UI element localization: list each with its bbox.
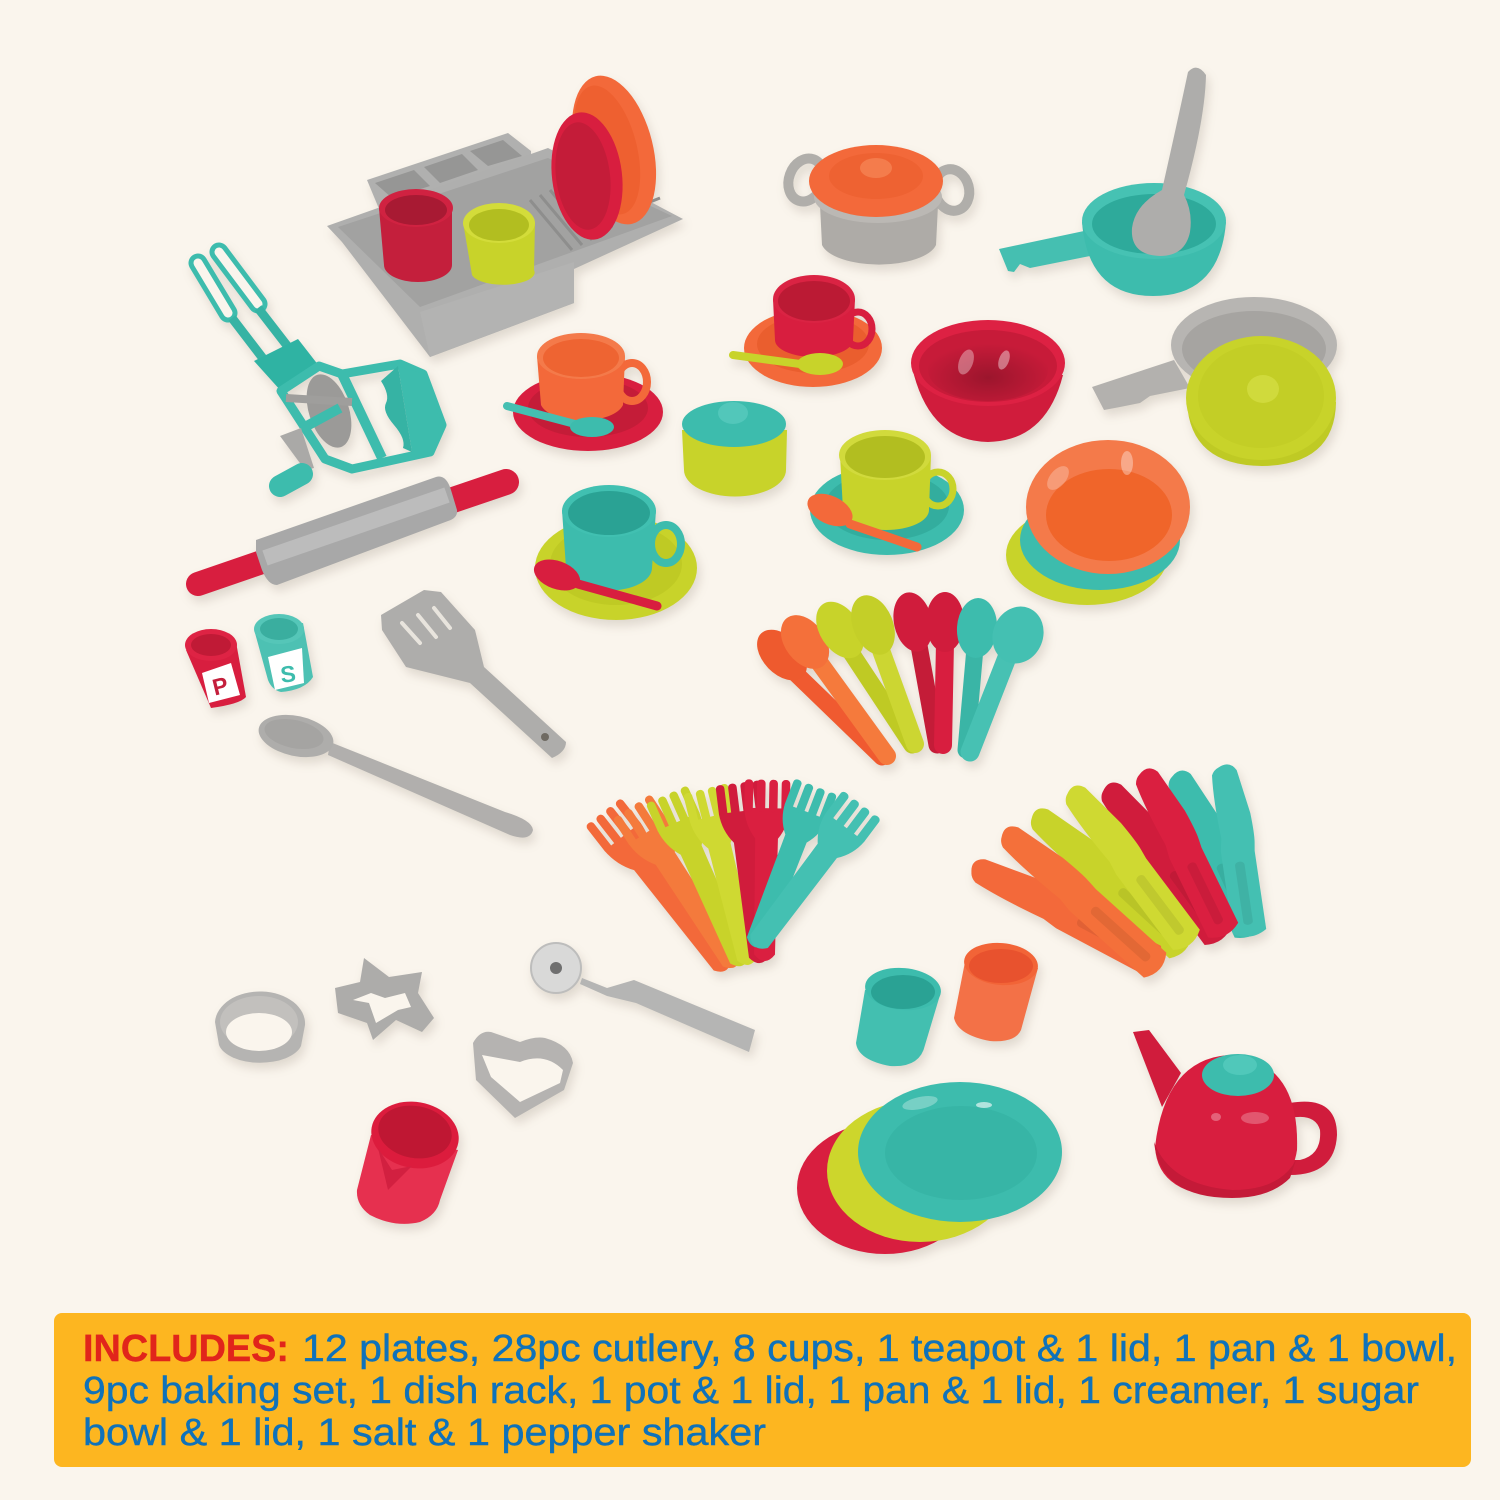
heart cookie cutter	[473, 1032, 573, 1118]
fan of knives	[965, 761, 1269, 982]
cup and saucer: teal on lime	[530, 485, 697, 620]
salt shaker	[254, 614, 313, 692]
round cookie cutter	[215, 991, 305, 1063]
egg beater	[198, 252, 442, 486]
pan with lime lid	[1092, 297, 1337, 466]
star cookie cutter	[335, 958, 434, 1040]
pot with orange lid	[783, 145, 974, 265]
cup and saucer: red on orange	[733, 275, 882, 387]
red creamer	[357, 1095, 464, 1224]
stacked soup plates	[1006, 440, 1190, 605]
includes banner	[54, 1313, 1471, 1467]
slotted spatula	[381, 590, 566, 758]
sugar bowl with teal lid	[682, 401, 787, 497]
pastry wheel	[531, 943, 755, 1052]
cup and saucer: lime on teal	[802, 430, 964, 555]
includes heading: INCLUDES:	[83, 1328, 289, 1370]
rolling pin	[198, 477, 506, 585]
grey serving spoon	[255, 709, 533, 838]
fan of spoons	[747, 589, 1052, 757]
cup and saucer: orange on red	[507, 333, 663, 451]
includes text line 1: 12 plates, 28pc cutlery, 8 cups, 1 teapot & 1 lid, 1 pan & 1 bowl,	[302, 1328, 1457, 1370]
red teapot	[1133, 1030, 1337, 1198]
teal pan with grey spoon	[999, 68, 1226, 296]
salt shaker: S	[279, 660, 297, 688]
stacked dinner plates	[797, 1082, 1062, 1254]
pepper shaker	[185, 629, 246, 708]
dish rack with cups and plates	[327, 67, 683, 357]
includes text line 2: 9pc baking set, 1 dish rack, 1 pot & 1 lid, 1 pan & 1 lid, 1 creamer, 1 sugar	[83, 1370, 1419, 1412]
pepper shaker: P	[210, 672, 231, 700]
includes text line 3: bowl & 1 lid, 1 salt & 1 pepper shaker	[83, 1412, 766, 1454]
orange cup	[954, 940, 1040, 1041]
teal cup	[856, 965, 943, 1066]
fan of forks	[585, 778, 881, 984]
red mixing bowl	[911, 320, 1065, 442]
